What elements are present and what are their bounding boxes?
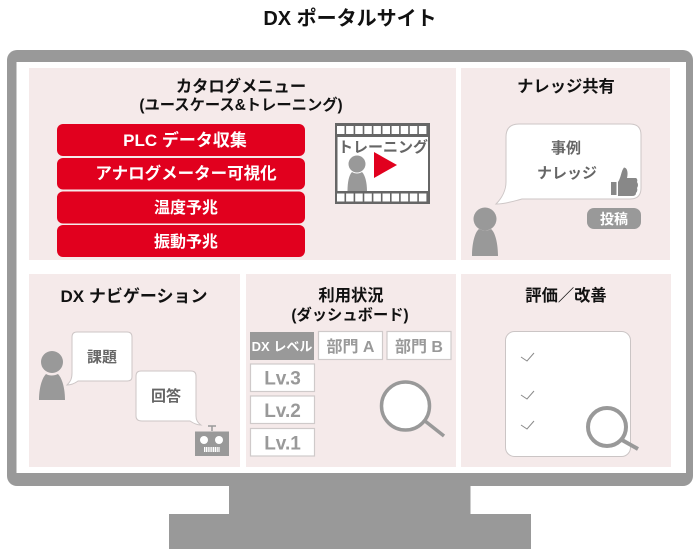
icon: check mark 1 — [521, 353, 534, 361]
row: level 2 — [250, 396, 314, 424]
icon: person — [39, 351, 65, 400]
text: case: 事例 — [551, 139, 581, 157]
icon: magnifier — [588, 408, 638, 449]
menu button: vibration: 振動予兆 — [154, 233, 218, 251]
heading: knowledge sharing: ナレッジ共有 — [517, 78, 615, 96]
row: level 2: Lv.2 — [264, 401, 301, 422]
panel: evaluation and improvement — [461, 274, 671, 467]
subheading: dashboard: (ダッシュボード) — [291, 306, 409, 324]
title: DX ポータルサイト — [263, 7, 437, 30]
menu button: PLC data: PLC データ収集 — [123, 130, 247, 150]
table header: department B — [387, 332, 451, 360]
button: post: 投稿 — [600, 211, 628, 227]
monitor screen — [16, 62, 686, 473]
speech bubble: answer — [136, 371, 201, 425]
icon: training video — [335, 123, 430, 204]
checklist card — [506, 332, 630, 456]
monitor stand — [169, 480, 531, 549]
menu button: temperature — [57, 192, 305, 224]
menu button: analog meter: アナログメーター可視化 — [95, 163, 277, 183]
panel: usage dashboard — [246, 274, 456, 467]
button: post — [587, 208, 641, 229]
table header: DX level — [250, 332, 314, 360]
monitor bezel — [7, 50, 693, 486]
panel: knowledge sharing — [461, 68, 670, 260]
text: issue: 課題 — [87, 349, 117, 366]
subheading: use cases and training: (ユースケース&トレーニング) — [139, 96, 343, 114]
table header: DX level: DX レベル — [252, 339, 312, 354]
menu button: temperature: 温度予兆 — [154, 198, 218, 217]
row: level 1 — [250, 428, 314, 456]
text: answer: 回答 — [151, 387, 181, 405]
heading: usage: 利用状況 — [318, 287, 384, 305]
speech bubble: issue — [67, 332, 132, 385]
row: level 1: Lv.1 — [264, 434, 301, 454]
panel: catalog menu — [29, 68, 456, 260]
row: level 3: Lv.3 — [264, 368, 301, 390]
icon: check mark 2 — [521, 391, 534, 399]
menu button: vibration — [57, 225, 305, 257]
menu button: analog meter — [57, 158, 305, 190]
panel: DX navigation — [29, 274, 240, 467]
heading: evaluation: 評価／改善 — [525, 287, 607, 305]
table header: department A — [318, 332, 382, 360]
icon: training video: トレーニング — [338, 138, 428, 156]
icon: check mark 3 — [521, 421, 534, 429]
text: knowledge: ナレッジ — [537, 165, 597, 182]
speech bubble — [496, 124, 641, 204]
table header: department A: 部門 A — [326, 338, 375, 356]
heading: catalog menu: カタログメニュー — [176, 77, 306, 96]
row: level 3 — [250, 364, 314, 392]
menu button: PLC data — [57, 124, 305, 156]
icon: person — [472, 208, 498, 256]
heading: DX navigation: DX ナビゲーション — [60, 286, 208, 306]
icon: thumbs up — [611, 168, 638, 196]
table header: department B: 部門 B — [395, 338, 443, 356]
icon: magnifier — [382, 382, 444, 436]
icon: robot — [195, 426, 229, 456]
